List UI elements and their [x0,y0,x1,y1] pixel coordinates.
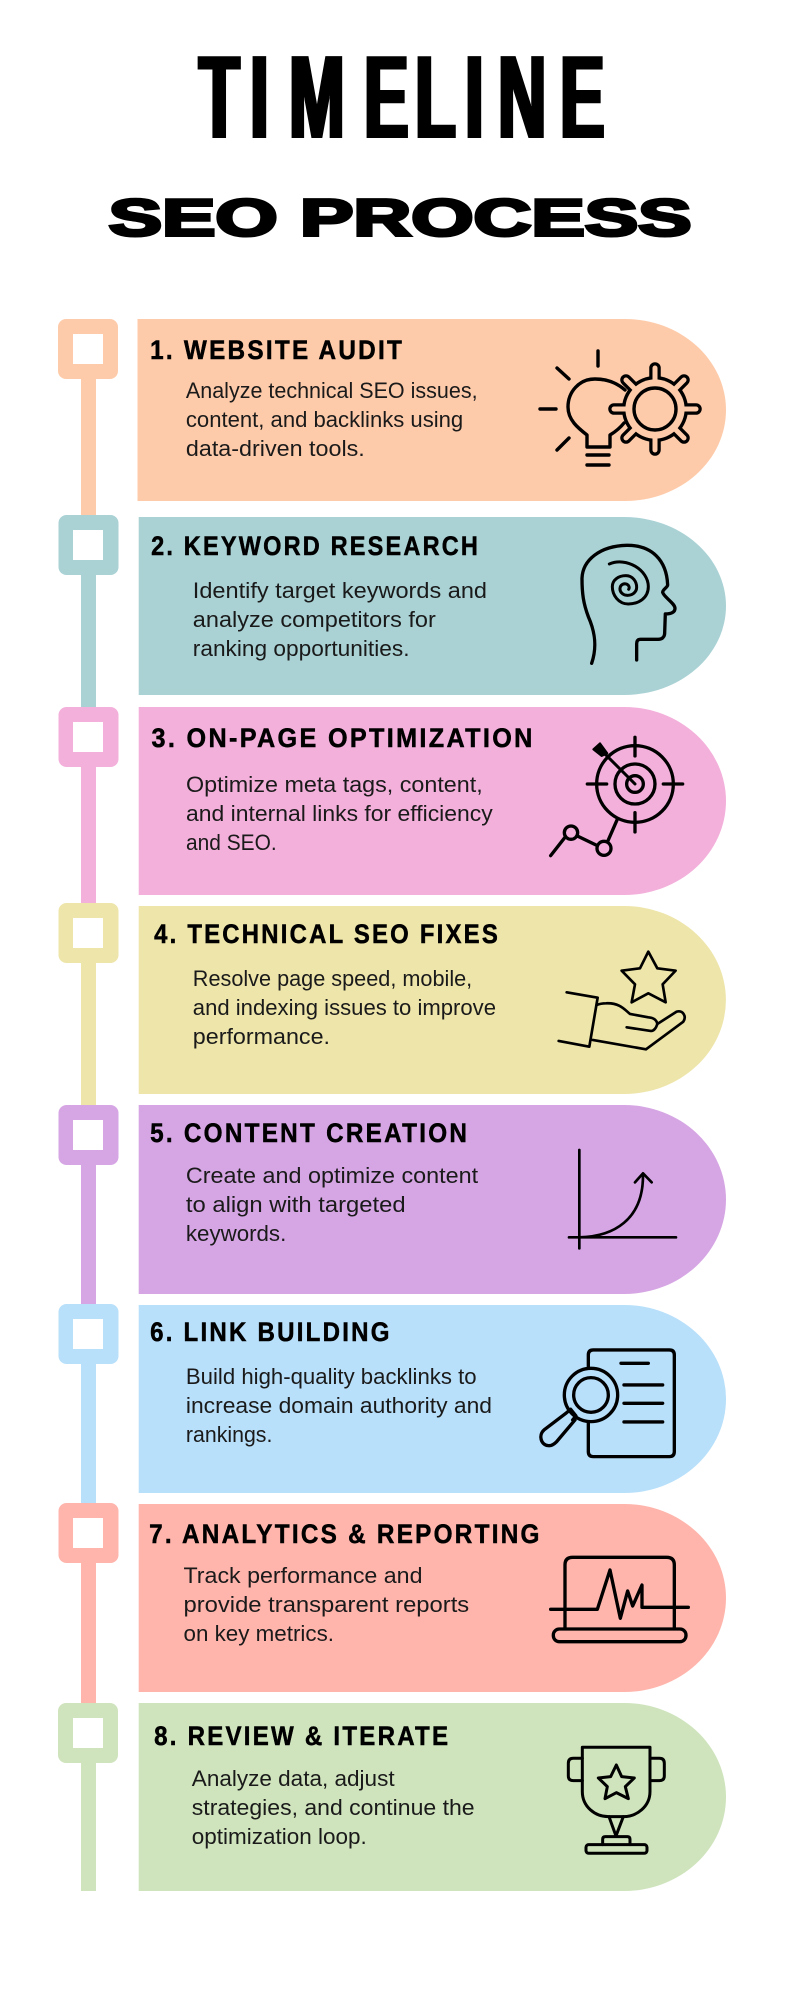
description 3 [186,772,493,855]
timeline marker 1 [58,319,118,379]
card 3 [139,707,726,895]
description 6 [186,1364,492,1447]
step 5: content creation [58,1105,726,1304]
icon: trophy [568,1747,664,1853]
icon: light bulb and gear [540,351,696,465]
timeline marker 7 [58,1503,118,1563]
timeline marker 4 [58,903,118,963]
description 3: and SEO. [186,830,277,855]
heading 4: 4. TECHNICAL SEO FIXES [154,919,500,949]
icon: target and chart [551,737,683,856]
step 8: review and iterate [58,1703,726,1891]
description 6: increase domain authority and [186,1393,492,1418]
card 6 [139,1305,726,1493]
description 2: analyze competitors for [193,607,436,632]
heading 2: 2. KEYWORD RESEARCH [151,531,480,561]
timeline marker 3 [58,707,118,767]
description 4 [193,966,496,1049]
card 5 [139,1105,726,1294]
description 1: Analyze technical SEO issues, [186,378,478,403]
card 2 [139,517,726,695]
subtitle: SEO PROCESS [109,190,692,248]
heading 7: 7. ANALYTICS & REPORTING [149,1519,542,1549]
description 4: performance. [193,1024,330,1049]
step 1: website audit [58,319,726,515]
description 2: ranking opportunities. [193,636,410,661]
step 2: keyword research [58,515,726,707]
description 8: optimization loop. [192,1824,367,1849]
timeline marker 6 [58,1304,118,1364]
description 1: data-driven tools. [186,436,365,461]
icon: laptop with pulse [551,1557,688,1642]
heading 5: 5. CONTENT CREATION [150,1118,469,1148]
description 1: content, and backlinks using [186,407,463,432]
card 4 [139,906,726,1094]
description 7: provide transparent reports [184,1592,469,1617]
timeline stem 6 [81,1364,96,1503]
card 1 [138,319,726,501]
description 6: rankings. [186,1422,272,1447]
timeline stem 7 [81,1563,96,1703]
icon: head with spiral [582,545,675,663]
description 5: keywords. [186,1221,286,1246]
heading 6: 6. LINK BUILDING [150,1317,392,1347]
timeline stem 3 [81,767,96,903]
description 4: Resolve page speed, mobile, [193,966,472,991]
heading 1: 1. WEBSITE AUDIT [150,335,404,365]
icon: hand holding star [559,952,685,1049]
timeline stem 5 [81,1165,96,1304]
step 4: technical seo fixes [58,903,726,1105]
description 1 [186,378,478,461]
timeline stem 1 [81,379,96,515]
timeline stem 8 [81,1763,96,1891]
description 2: Identify target keywords and [193,578,487,603]
step 6: link building [58,1304,726,1503]
step 7: analytics and reporting [58,1503,726,1703]
description 3: Optimize meta tags, content, [186,772,483,797]
step 3: on-page optimization [58,707,726,903]
timeline stem 2 [81,575,96,707]
timeline marker 5 [58,1105,118,1165]
icon: document and magnifier [541,1350,674,1457]
description 5: Create and optimize content [186,1163,478,1188]
description 8: Analyze data, adjust [192,1766,395,1791]
description 3: and internal links for efficiency [186,801,493,826]
description 7: Track performance and [184,1563,422,1588]
description 5: to align with targeted [186,1192,406,1217]
timeline marker 2 [58,515,118,575]
title: TIMELINE [199,32,605,164]
description 8: strategies, and continue the [192,1795,475,1820]
description 8 [192,1766,475,1849]
heading 8: 8. REVIEW & ITERATE [154,1721,450,1751]
icon: growth chart [569,1150,676,1248]
heading 3: 3. ON-PAGE OPTIMIZATION [152,723,535,753]
timeline stem 4 [81,963,96,1105]
description 5 [186,1163,478,1246]
description 2 [193,578,487,661]
card 8 [139,1703,726,1891]
description 6: Build high-quality backlinks to [186,1364,477,1389]
description 7: on key metrics. [184,1621,334,1646]
description 7 [184,1563,469,1646]
timeline marker 8 [58,1703,118,1763]
description 4: and indexing issues to improve [193,995,496,1020]
card 7 [139,1504,726,1692]
